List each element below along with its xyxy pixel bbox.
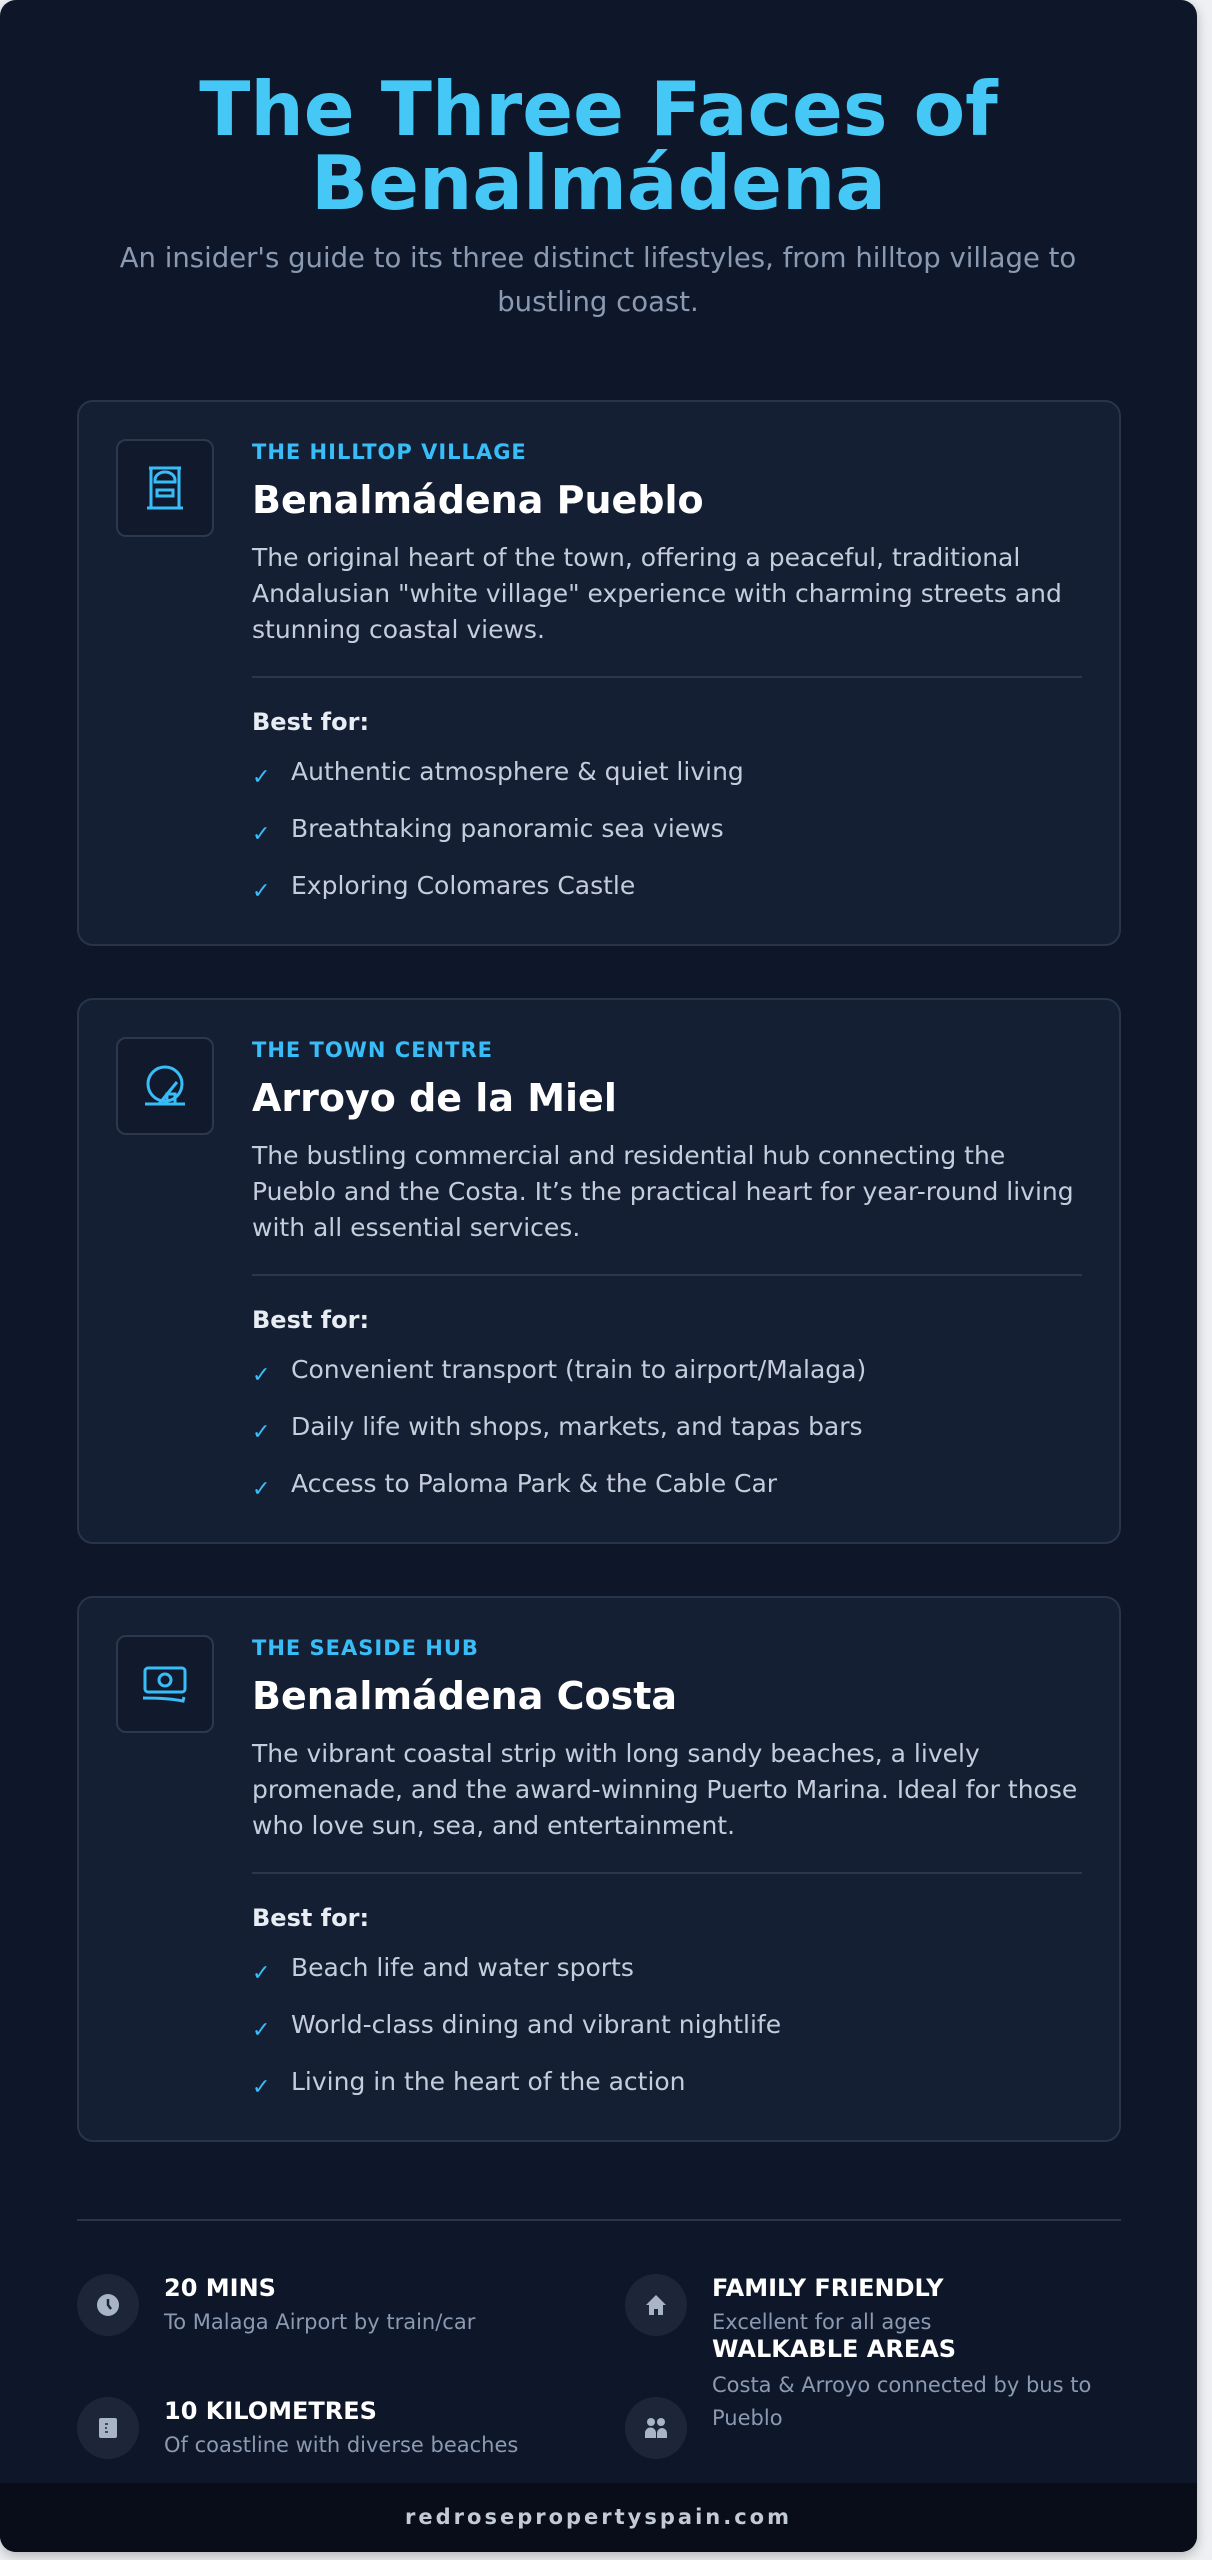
label: THE HILLTOP VILLAGE	[252, 440, 527, 464]
best for heading: Best for:	[252, 1904, 369, 1932]
stat: 20 mins	[77, 2274, 476, 2336]
stat: family friendly: Excellent for all ages	[712, 2310, 931, 2334]
list: World-class dining and vibrant nightlife	[291, 2010, 781, 2039]
stat: 20 mins: 20 MINS	[164, 2274, 276, 2302]
list: ✓	[252, 822, 270, 847]
footer: redrosepropertyspain.com	[405, 2505, 792, 2529]
list: Breathtaking panoramic sea views	[291, 814, 724, 843]
icon: house	[625, 2274, 687, 2336]
stat: 10 km	[77, 2397, 518, 2459]
list	[252, 757, 744, 904]
heading: Benalmádena Costa	[252, 1674, 677, 1718]
list: ✓	[252, 1477, 270, 1502]
icon: ferris wheel	[116, 1037, 214, 1135]
list	[252, 1953, 781, 2100]
list: ✓	[252, 1363, 270, 1388]
list: ✓	[252, 1420, 270, 1445]
icon: money	[116, 1635, 214, 1733]
panel: arroyo	[77, 998, 1121, 1544]
icon: clock	[77, 2274, 139, 2336]
icon: village	[116, 439, 214, 537]
stat: 10 km: Of coastline with diverse beaches	[164, 2433, 518, 2457]
label: THE TOWN CENTRE	[252, 1038, 493, 1062]
best for heading: Best for:	[252, 708, 369, 736]
stat: 20 mins: To Malaga Airport by train/car	[164, 2310, 475, 2334]
list: ✓	[252, 765, 270, 790]
list	[252, 1355, 866, 1502]
title: The Three Faces of	[199, 65, 998, 153]
stat: 10 km: 10 KILOMETRES	[164, 2397, 377, 2425]
footer	[0, 2483, 1197, 2552]
list: Authentic atmosphere & quiet living	[291, 757, 744, 786]
title	[199, 65, 998, 227]
best for heading: Best for:	[252, 1306, 369, 1334]
stat: family friendly: FAMILY FRIENDLY	[712, 2274, 943, 2302]
list: ✓	[252, 2075, 270, 2100]
icon: ruler	[77, 2397, 139, 2459]
stat: walkable: Costa & Arroyo connected by bus to Pueblo	[712, 2373, 1091, 2430]
description: The bustling commercial and residential hub connecting the Pueblo and the Costa. It’s the practical heart for year-round living with all essential services.	[252, 1141, 1074, 1242]
list: Living in the heart of the action	[291, 2067, 686, 2096]
stat: walkable	[625, 2335, 1091, 2459]
list: Convenient transport (train to airport/Malaga)	[291, 1355, 866, 1384]
list: Beach life and water sports	[291, 1953, 634, 1982]
description: The original heart of the town, offering a peaceful, traditional Andalusian "white village" experience with charming streets and stunning coastal views.	[252, 543, 1062, 644]
list: Daily life with shops, markets, and tapas bars	[291, 1412, 863, 1441]
icon: people	[625, 2397, 687, 2459]
subtitle: An insider's guide to its three distinct lifestyles, from hilltop village to bustling coast.	[120, 242, 1076, 318]
panel: pueblo	[77, 400, 1121, 946]
title: Benalmádena	[311, 139, 886, 227]
heading: Arroyo de la Miel	[252, 1076, 617, 1120]
description: The vibrant coastal strip with long sandy beaches, a lively promenade, and the award-winning Puerto Marina. Ideal for those who love sun, sea, and entertainment.	[252, 1739, 1077, 1840]
stat: walkable: WALKABLE AREAS	[712, 2335, 956, 2363]
list: ✓	[252, 1961, 270, 1986]
label: THE SEASIDE HUB	[252, 1636, 479, 1660]
panel: costa	[77, 1596, 1121, 2142]
list: ✓	[252, 879, 270, 904]
heading: Benalmádena Pueblo	[252, 478, 704, 522]
stat: family friendly	[625, 2274, 944, 2336]
list: Access to Paloma Park & the Cable Car	[291, 1469, 777, 1498]
list: Exploring Colomares Castle	[291, 871, 635, 900]
list: ✓	[252, 2018, 270, 2043]
